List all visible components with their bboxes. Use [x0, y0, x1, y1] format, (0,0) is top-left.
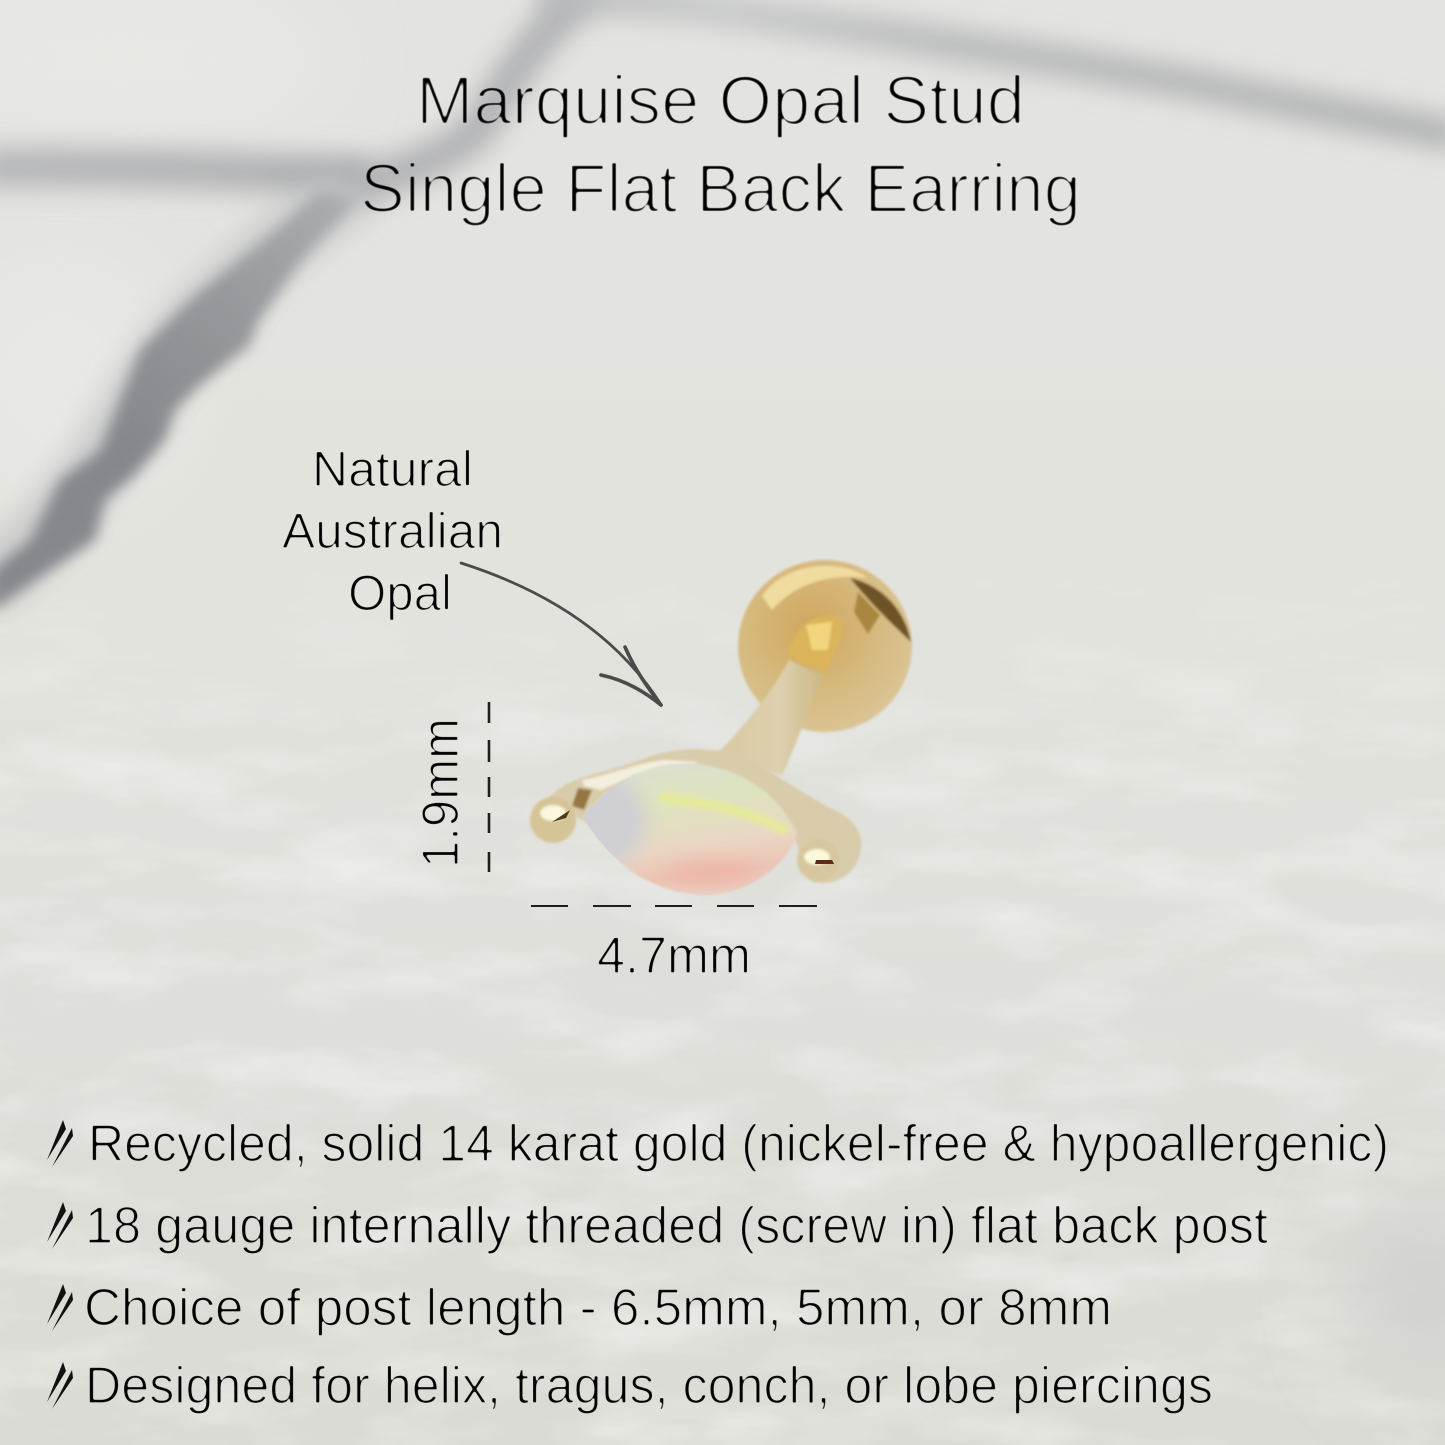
- dimension: width label: 4.7mm: [597, 927, 751, 985]
- icon: claw setting: [548, 749, 861, 883]
- icon: left bead: [530, 797, 576, 843]
- dimension: height label: 1.9mm: [412, 718, 470, 868]
- bullet: recycled gold: Recycled, solid 14 karat gold (nickel-free & hypoallergenic): [88, 1115, 1389, 1173]
- label: natural australian opal: Natural: [312, 441, 473, 497]
- title: Single Flat Back Earring: [360, 150, 1081, 227]
- label: natural australian opal: Australian: [282, 503, 503, 559]
- bullet: piercings: Designed for helix, tragus, conch, or lobe piercings: [85, 1357, 1213, 1415]
- icon: earring back disc: [738, 560, 912, 732]
- earring photo: [530, 560, 912, 895]
- arrow: label to opal: [461, 563, 661, 705]
- dimension: width dashed line: [531, 905, 817, 907]
- icon: right bead: [797, 839, 839, 881]
- icon: marquise opal stone: [583, 762, 797, 896]
- label: natural australian opal: [282, 441, 503, 621]
- dimension: height dashed line: [488, 702, 490, 872]
- label: natural australian opal: Opal: [348, 565, 452, 621]
- icon: earring post: [716, 660, 824, 775]
- feature list: [47, 1115, 1389, 1415]
- bullet: gauge: 18 gauge internally threaded (screw in) flat back post: [85, 1197, 1269, 1255]
- title: Marquise Opal Stud: [416, 62, 1025, 139]
- title: [360, 62, 1081, 227]
- bullet: post length: Choice of post length - 6.5mm, 5mm, or 8mm: [84, 1279, 1112, 1337]
